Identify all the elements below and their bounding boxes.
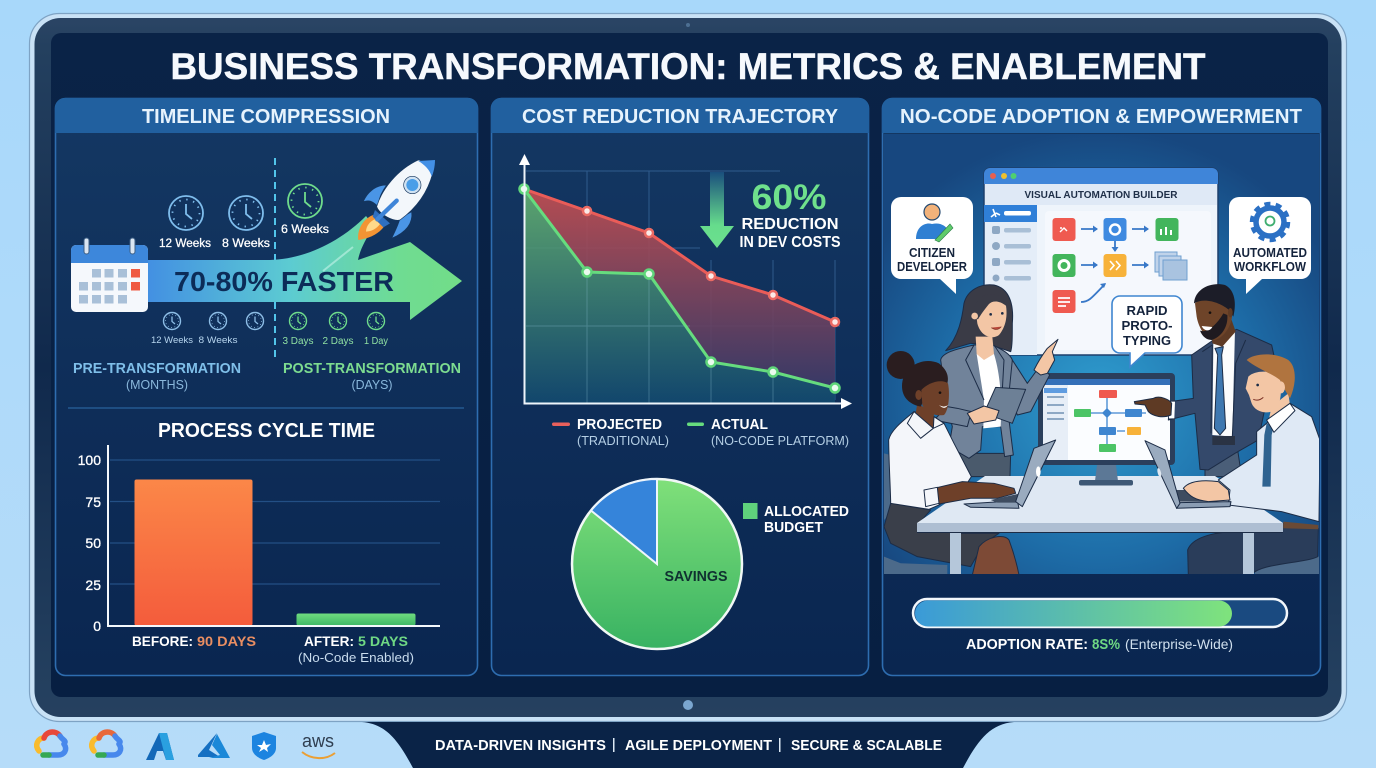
browser: visual automation builder [984, 168, 1218, 355]
bubble: citizen developer: DEVELOPER [897, 260, 967, 274]
bubble: rapid prototyping [1112, 296, 1182, 367]
bar chart: process cycle time [78, 445, 440, 665]
footer text: AGILE DEPLOYMENT [625, 738, 772, 754]
icon: shield logo [252, 732, 276, 760]
small labels pre: 12 Weeks [151, 335, 193, 346]
pie label: SAVINGS [664, 569, 728, 585]
bubble: citizen developer [891, 197, 973, 294]
y axis labels [78, 452, 101, 634]
callout: 60 percent [740, 178, 841, 251]
panel header [491, 98, 869, 133]
label: 6 weeks: 6 Weeks [281, 224, 329, 236]
seated woman arms and laptop [924, 440, 1056, 508]
y axis labels: 75 [85, 494, 101, 510]
panel: timeline compression [55, 98, 478, 676]
small labels post [282, 336, 388, 347]
line chart: cost trajectory [519, 154, 852, 448]
legend: PROJECTED [577, 417, 662, 433]
panel: no-code adoption [882, 98, 1321, 676]
label: before [132, 633, 256, 649]
bubble: rapid prototyping: RAPID [1126, 303, 1168, 318]
clock: 6 weeks [288, 184, 322, 218]
y axis labels: 50 [85, 535, 101, 551]
bubble: rapid prototyping: PROTO- [1122, 318, 1172, 333]
person: standing woman [934, 285, 1058, 477]
bubble: automated workflow: WORKFLOW [1234, 260, 1306, 274]
panel header: TIMELINE COMPRESSION [142, 106, 390, 128]
icon: cloud logo 2 [92, 732, 121, 755]
person: seated man lower body [1188, 522, 1321, 575]
label: after: AFTER: [304, 633, 354, 649]
monitor stand [1079, 465, 1133, 486]
icon: citizen developer [916, 204, 953, 242]
icon: azure triangle logo [198, 733, 230, 758]
line: projected [524, 189, 839, 326]
legend [552, 417, 849, 448]
bubble: automated workflow [1229, 197, 1311, 294]
pie legend: ALLOCATED [764, 504, 849, 520]
bubble: rapid prototyping: TYPING [1123, 333, 1171, 348]
small clocks pre [164, 312, 264, 330]
divider line dashed [274, 158, 276, 360]
icon: cloud logo 1 [37, 732, 66, 755]
footer text: DATA-DRIVEN INSIGHTS [435, 738, 606, 754]
label: adoption rate: 8S% [1092, 637, 1120, 653]
pie legend [743, 503, 849, 536]
label: 8 weeks: 8 Weeks [222, 238, 270, 250]
legend: ACTUAL [711, 417, 768, 433]
clock: 12 weeks [169, 196, 203, 230]
label: before: 90 DAYS [197, 633, 256, 649]
title: BUSINESS TRANSFORMATION: METRICS & ENABLEMENT [170, 45, 1206, 87]
y axis labels: 25 [85, 577, 101, 593]
clock: 8 weeks [229, 196, 263, 230]
icon: azure A logo [146, 733, 174, 760]
icon: rocket [358, 160, 435, 240]
progress bar: adoption rate [913, 599, 1287, 627]
panel: cost reduction [491, 98, 869, 676]
small labels post: 1 Day [364, 336, 388, 347]
bubble: citizen developer: CITIZEN [909, 246, 955, 260]
legend: (NO-CODE PLATFORM) [711, 433, 849, 448]
workflow nodes [1052, 218, 1187, 313]
small labels pre: 8 Weeks [198, 335, 238, 346]
area: projected [524, 189, 835, 388]
label: after: (No-Code Enabled) [298, 650, 414, 665]
arrow label: 70-80% FASTER [174, 266, 394, 297]
label: adoption rate: (Enterprise-Wide) [1125, 636, 1233, 652]
label: 12 weeks: 12 Weeks [159, 238, 211, 250]
label: before: BEFORE: [132, 633, 193, 649]
label: adoption rate [966, 636, 1233, 653]
label: post-transformation: (DAYS) [352, 377, 392, 392]
axes [519, 154, 852, 409]
panel header [882, 98, 1321, 133]
label: adoption rate: ADOPTION RATE: [966, 637, 1088, 653]
pie chart: budget [572, 479, 849, 649]
label: after: 5 DAYS [358, 633, 408, 649]
vendor logos [37, 731, 335, 760]
bubble: automated workflow: AUTOMATED [1233, 246, 1307, 260]
line: actual [520, 184, 840, 392]
small labels pre [151, 335, 238, 346]
panel header: COST REDUCTION TRAJECTORY [522, 106, 839, 128]
label: pre-transformation [73, 360, 241, 392]
label: post-transformation [283, 360, 461, 392]
person: standing man [1134, 284, 1275, 477]
person: seated woman [884, 351, 1019, 575]
illustration: team scene [884, 134, 1321, 575]
area: actual [524, 189, 835, 403]
small labels post: 3 Days [282, 336, 314, 347]
arrow: down [700, 172, 734, 248]
pie legend: BUDGET [764, 520, 823, 536]
icon: gear [1252, 204, 1288, 240]
footer text [435, 738, 942, 754]
panel header: NO-CODE ADOPTION & EMPOWERMENT [900, 106, 1302, 128]
legend: (TRADITIONAL) [577, 433, 669, 448]
bar: after [296, 614, 416, 626]
bar: before [134, 480, 252, 626]
footer text: SECURE & SCALABLE [791, 738, 942, 754]
sidebar [984, 205, 1037, 355]
label: pre-transformation: PRE-TRANSFORMATION [73, 360, 241, 377]
heading: process cycle time: PROCESS CYCLE TIME [158, 420, 375, 442]
callout: 60 percent: IN DEV COSTS [740, 234, 841, 251]
label: after [298, 633, 414, 665]
label: post-transformation: POST-TRANSFORMATION [283, 360, 461, 377]
small labels post: 2 Days [322, 336, 354, 347]
small clocks post [290, 312, 384, 330]
desktop monitor [1038, 373, 1175, 465]
icon: aws logo: aws [302, 731, 334, 751]
browser title: VISUAL AUTOMATION BUILDER [1024, 189, 1178, 201]
table [917, 465, 1283, 574]
arrow: faster [148, 216, 462, 320]
callout: 60 percent: REDUCTION [742, 216, 838, 233]
panel header [55, 98, 478, 133]
label: pre-transformation: (MONTHS) [126, 377, 188, 392]
person: seated man upper body and laptop [1145, 354, 1320, 522]
callout: 60 percent: 60% [752, 178, 826, 217]
y axis labels: 100 [78, 452, 101, 468]
footer tab [362, 722, 1014, 768]
icon: calendar [71, 238, 148, 312]
y axis labels: 0 [93, 618, 101, 634]
